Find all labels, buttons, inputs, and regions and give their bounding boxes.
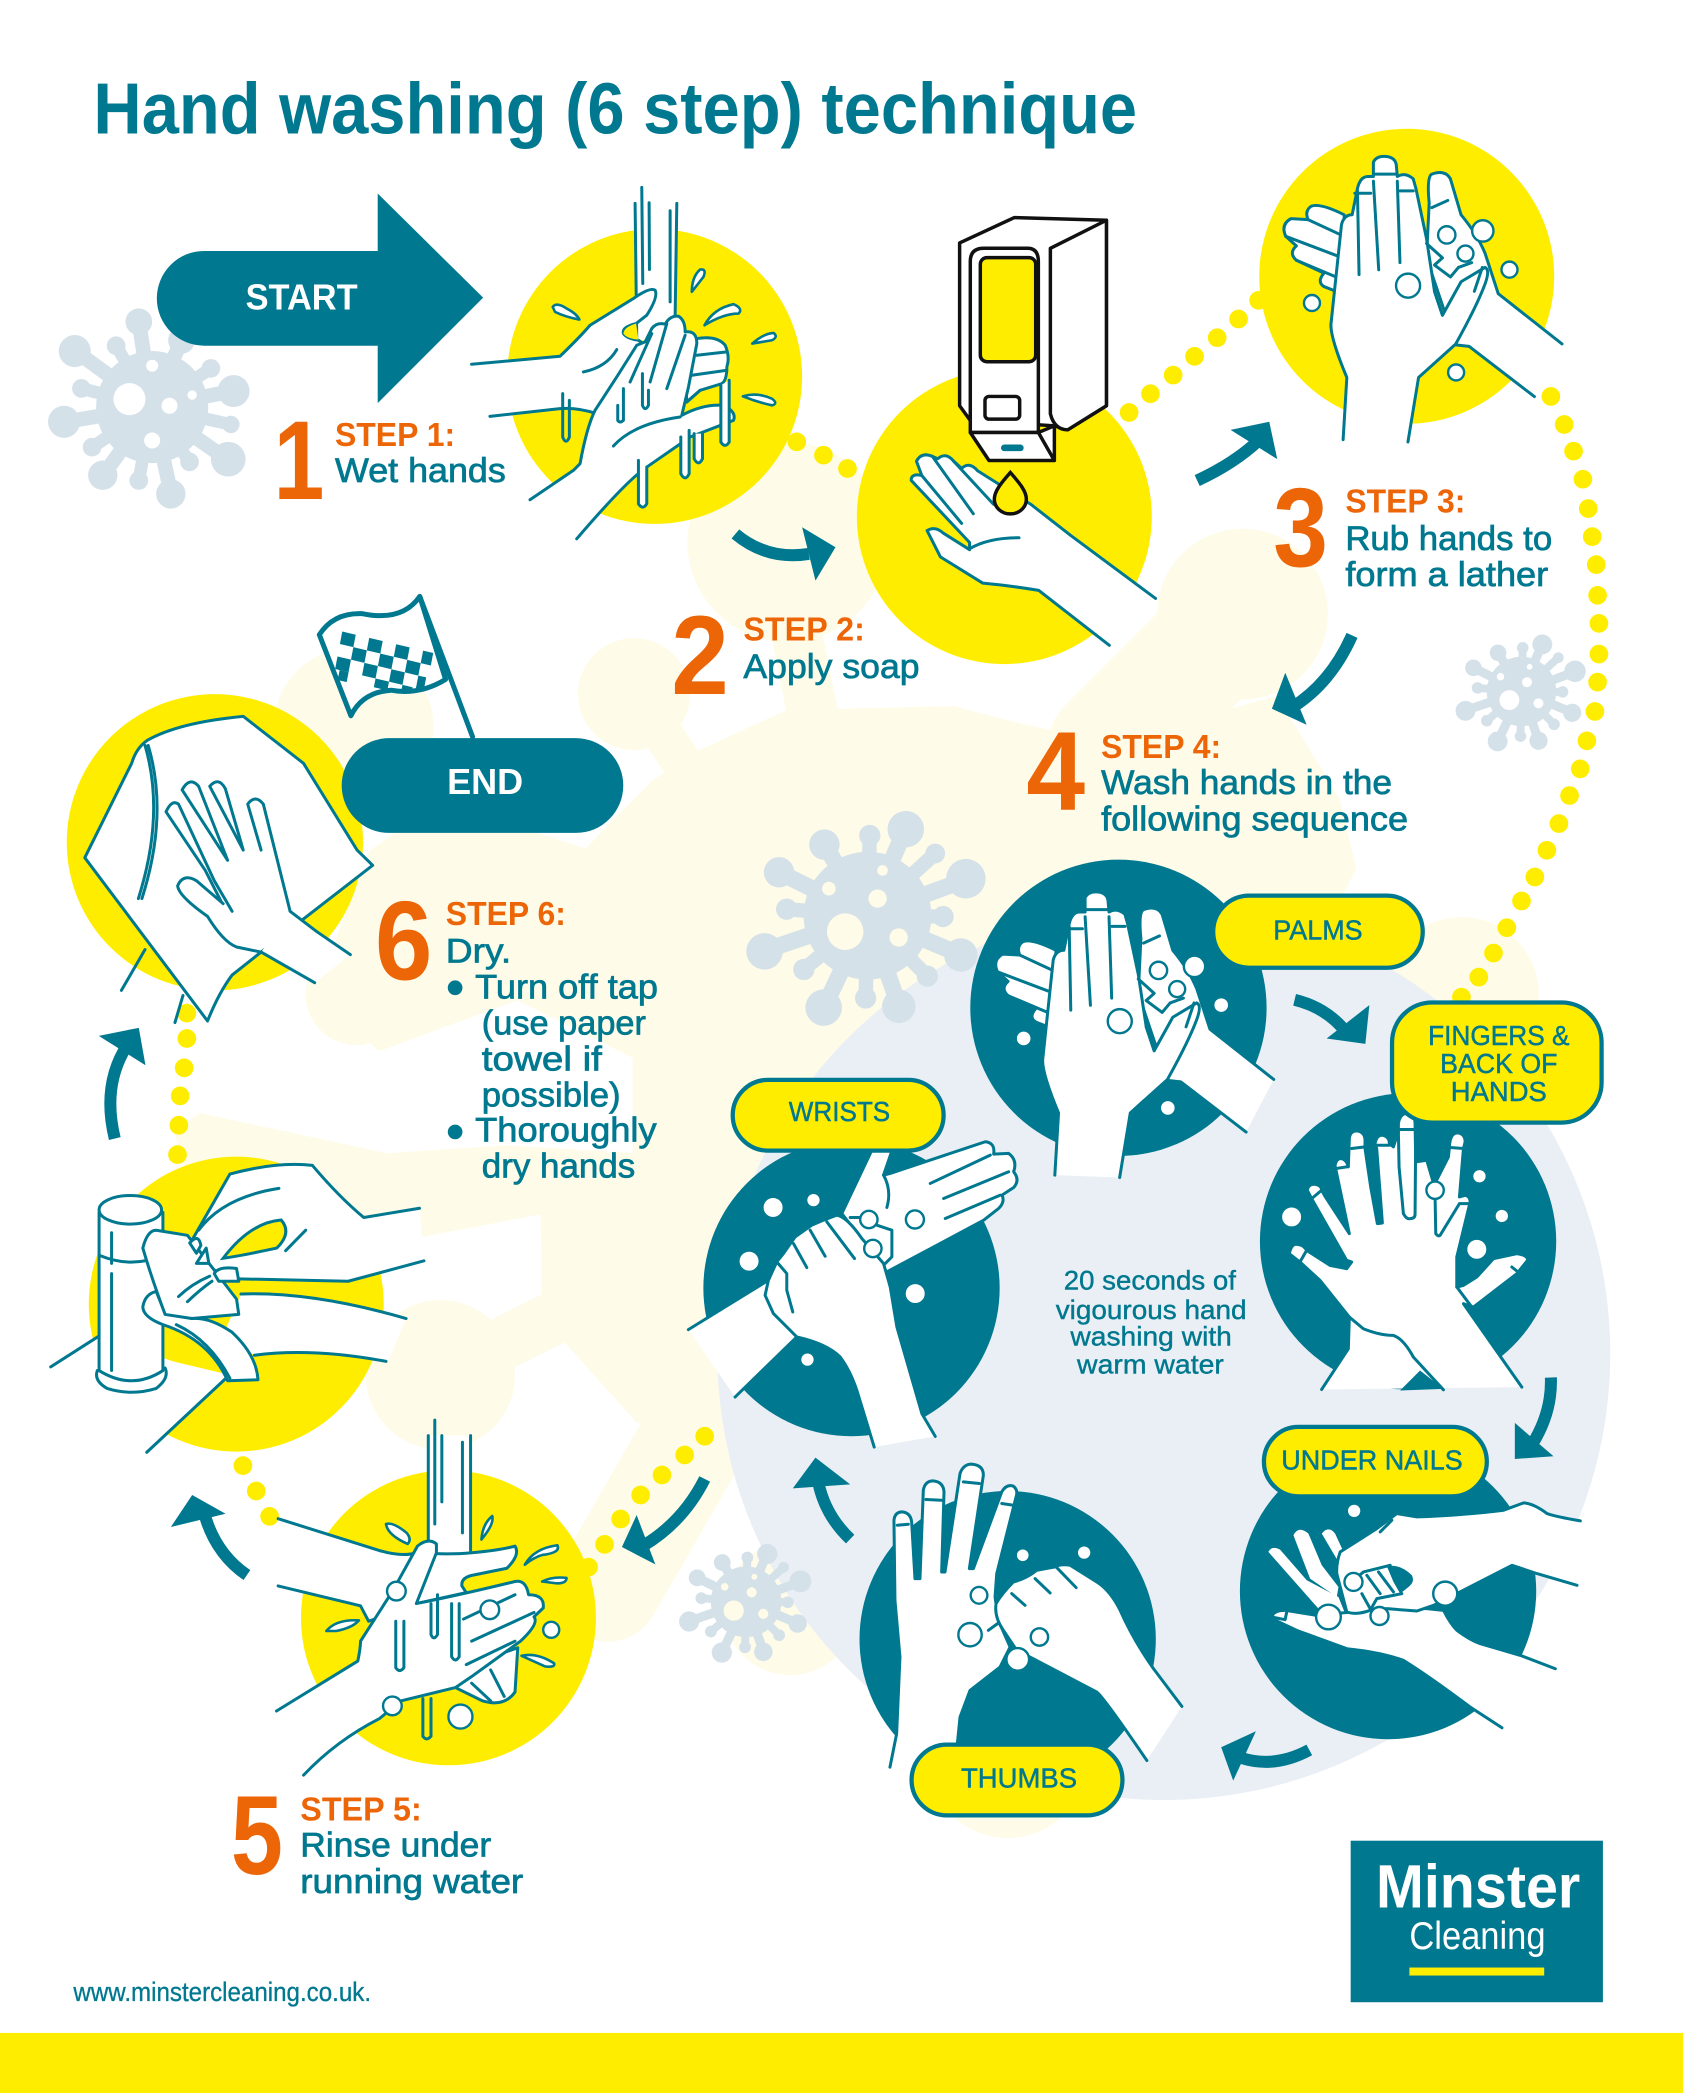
arrow: step 5 to tap <box>171 1495 247 1575</box>
step 4 text: following sequence <box>1101 800 1408 838</box>
virus: lower <box>657 1516 834 1692</box>
centre note: 20 seconds: 20 seconds of <box>1064 1265 1236 1295</box>
soap hand <box>911 455 1156 645</box>
virus: centre <box>707 760 1026 1079</box>
step 2 number: 2 <box>671 593 729 718</box>
step 4 number: 4 <box>1026 709 1085 834</box>
arrow: step 3 to 4 <box>1272 635 1352 725</box>
wash step: fingers and back of hands <box>1260 1093 1556 1390</box>
step 6 text: possible) <box>482 1077 621 1115</box>
step 5 description: Rinse under <box>300 1827 491 1865</box>
arrow: tap to step 6 <box>99 1028 145 1139</box>
step 3 text <box>1273 465 1552 594</box>
step 6 description: Dry. <box>446 932 511 970</box>
step 3 description: Rub hands to <box>1345 520 1552 558</box>
wash step: thumbs <box>860 1464 1182 1787</box>
step 3 text: form a lather <box>1345 556 1548 594</box>
wash step: palms <box>970 860 1274 1178</box>
label: wrists: WRISTS <box>789 1096 890 1127</box>
step 6 text: (use paper <box>482 1004 646 1042</box>
centre note: 20 seconds <box>1056 1265 1247 1380</box>
label: under nails <box>1264 1427 1487 1496</box>
label: thumbs: THUMBS <box>961 1762 1077 1793</box>
end pill <box>342 738 623 833</box>
centre note: 20 seconds: washing with <box>1069 1321 1232 1352</box>
arrow: palms to fingers <box>1295 1000 1369 1044</box>
step 3 number: 3 <box>1273 465 1328 590</box>
virus: right <box>1434 607 1608 780</box>
logo: Minster Cleaning <box>1351 1841 1603 2002</box>
step 3 heading: STEP 3: <box>1345 484 1465 521</box>
label: wrists <box>733 1080 944 1151</box>
yellow dotted route <box>168 291 1608 1576</box>
checkered flag <box>319 596 473 737</box>
arrow: fingers to nails <box>1515 1378 1554 1459</box>
step 1 text <box>274 398 506 523</box>
start label: START <box>246 277 358 318</box>
logo: Minster Cleaning: Minster <box>1376 1852 1580 1921</box>
background virus illustration <box>180 442 1539 1838</box>
arrow: wrists to step 5 <box>622 1479 705 1564</box>
start arrow <box>157 194 483 403</box>
footer band <box>0 2033 1683 2093</box>
step 5 heading: STEP 5: <box>300 1792 422 1829</box>
step 6 text: Thoroughly <box>475 1111 657 1149</box>
paper towel <box>143 1230 239 1319</box>
title: Hand washing (6 step) technique <box>93 69 1137 149</box>
label: palms: PALMS <box>1273 915 1363 946</box>
tap illustration: turn off tap <box>51 1157 424 1452</box>
centre note: 20 seconds: vigourous hand <box>1056 1295 1247 1325</box>
step 6 text: Turn off tap <box>475 968 658 1006</box>
step 1 number: 1 <box>274 398 324 523</box>
grey circle behind wash sequence <box>717 907 1610 1800</box>
step 4 text <box>1026 709 1408 838</box>
soap dispenser <box>960 218 1106 461</box>
label: thumbs <box>912 1745 1122 1815</box>
step 6 heading: STEP 6: <box>446 896 566 933</box>
label: palms <box>1213 896 1423 968</box>
end label: END <box>447 761 523 802</box>
step 6 text <box>375 879 658 1185</box>
virus: left <box>48 308 250 509</box>
step 3 illustration: rub hands <box>1259 129 1562 442</box>
step 1 illustration: wet hands <box>472 187 802 539</box>
logo: Minster Cleaning: Cleaning <box>1409 1915 1546 1958</box>
arrow: step 2 to 3 <box>1197 422 1277 481</box>
wash step: under nails <box>1240 1443 1580 1739</box>
step 2 text <box>671 593 920 718</box>
step 2 heading: STEP 2: <box>743 612 865 649</box>
step 6 text: towel if <box>482 1041 602 1079</box>
website url: www.minstercleaning.co.uk. <box>73 1977 371 2007</box>
step 5 illustration: rinse <box>276 1420 596 1775</box>
label: fingers and back of hands: BACK OF <box>1440 1048 1558 1079</box>
step 5 number: 5 <box>231 1773 283 1898</box>
step 6 illustration: dry hands <box>67 694 373 1023</box>
tap <box>99 1212 163 1381</box>
arrow: thumbs to wrists <box>793 1458 850 1539</box>
label: fingers and back of hands: HANDS <box>1451 1076 1547 1107</box>
step 6 text: dry hands <box>482 1147 635 1185</box>
label: fingers and back of hands <box>1392 1002 1602 1123</box>
step 4 heading: STEP 4: <box>1101 729 1221 766</box>
centre note: 20 seconds: warm water <box>1076 1350 1224 1380</box>
arrow: nails to thumbs <box>1221 1731 1309 1781</box>
soap drop <box>994 473 1026 514</box>
label: under nails: UNDER NAILS <box>1281 1445 1463 1476</box>
step 1 heading: STEP 1: <box>335 417 455 454</box>
step 5 text: running water <box>300 1863 523 1901</box>
label: fingers and back of hands: FINGERS & <box>1428 1020 1570 1051</box>
step 2 illustration: soap dispenser and hand <box>857 218 1156 664</box>
step 2 description: Apply soap <box>743 648 920 686</box>
step 6 number: 6 <box>375 879 432 1004</box>
step 1 description: Wet hands <box>335 452 506 490</box>
step 4 description: Wash hands in the <box>1101 764 1392 802</box>
step 5 text <box>231 1773 523 1901</box>
arrow: step 1 to 2 <box>735 527 835 581</box>
hands turning tap <box>192 1164 424 1281</box>
wash step: wrists <box>688 1140 1017 1447</box>
